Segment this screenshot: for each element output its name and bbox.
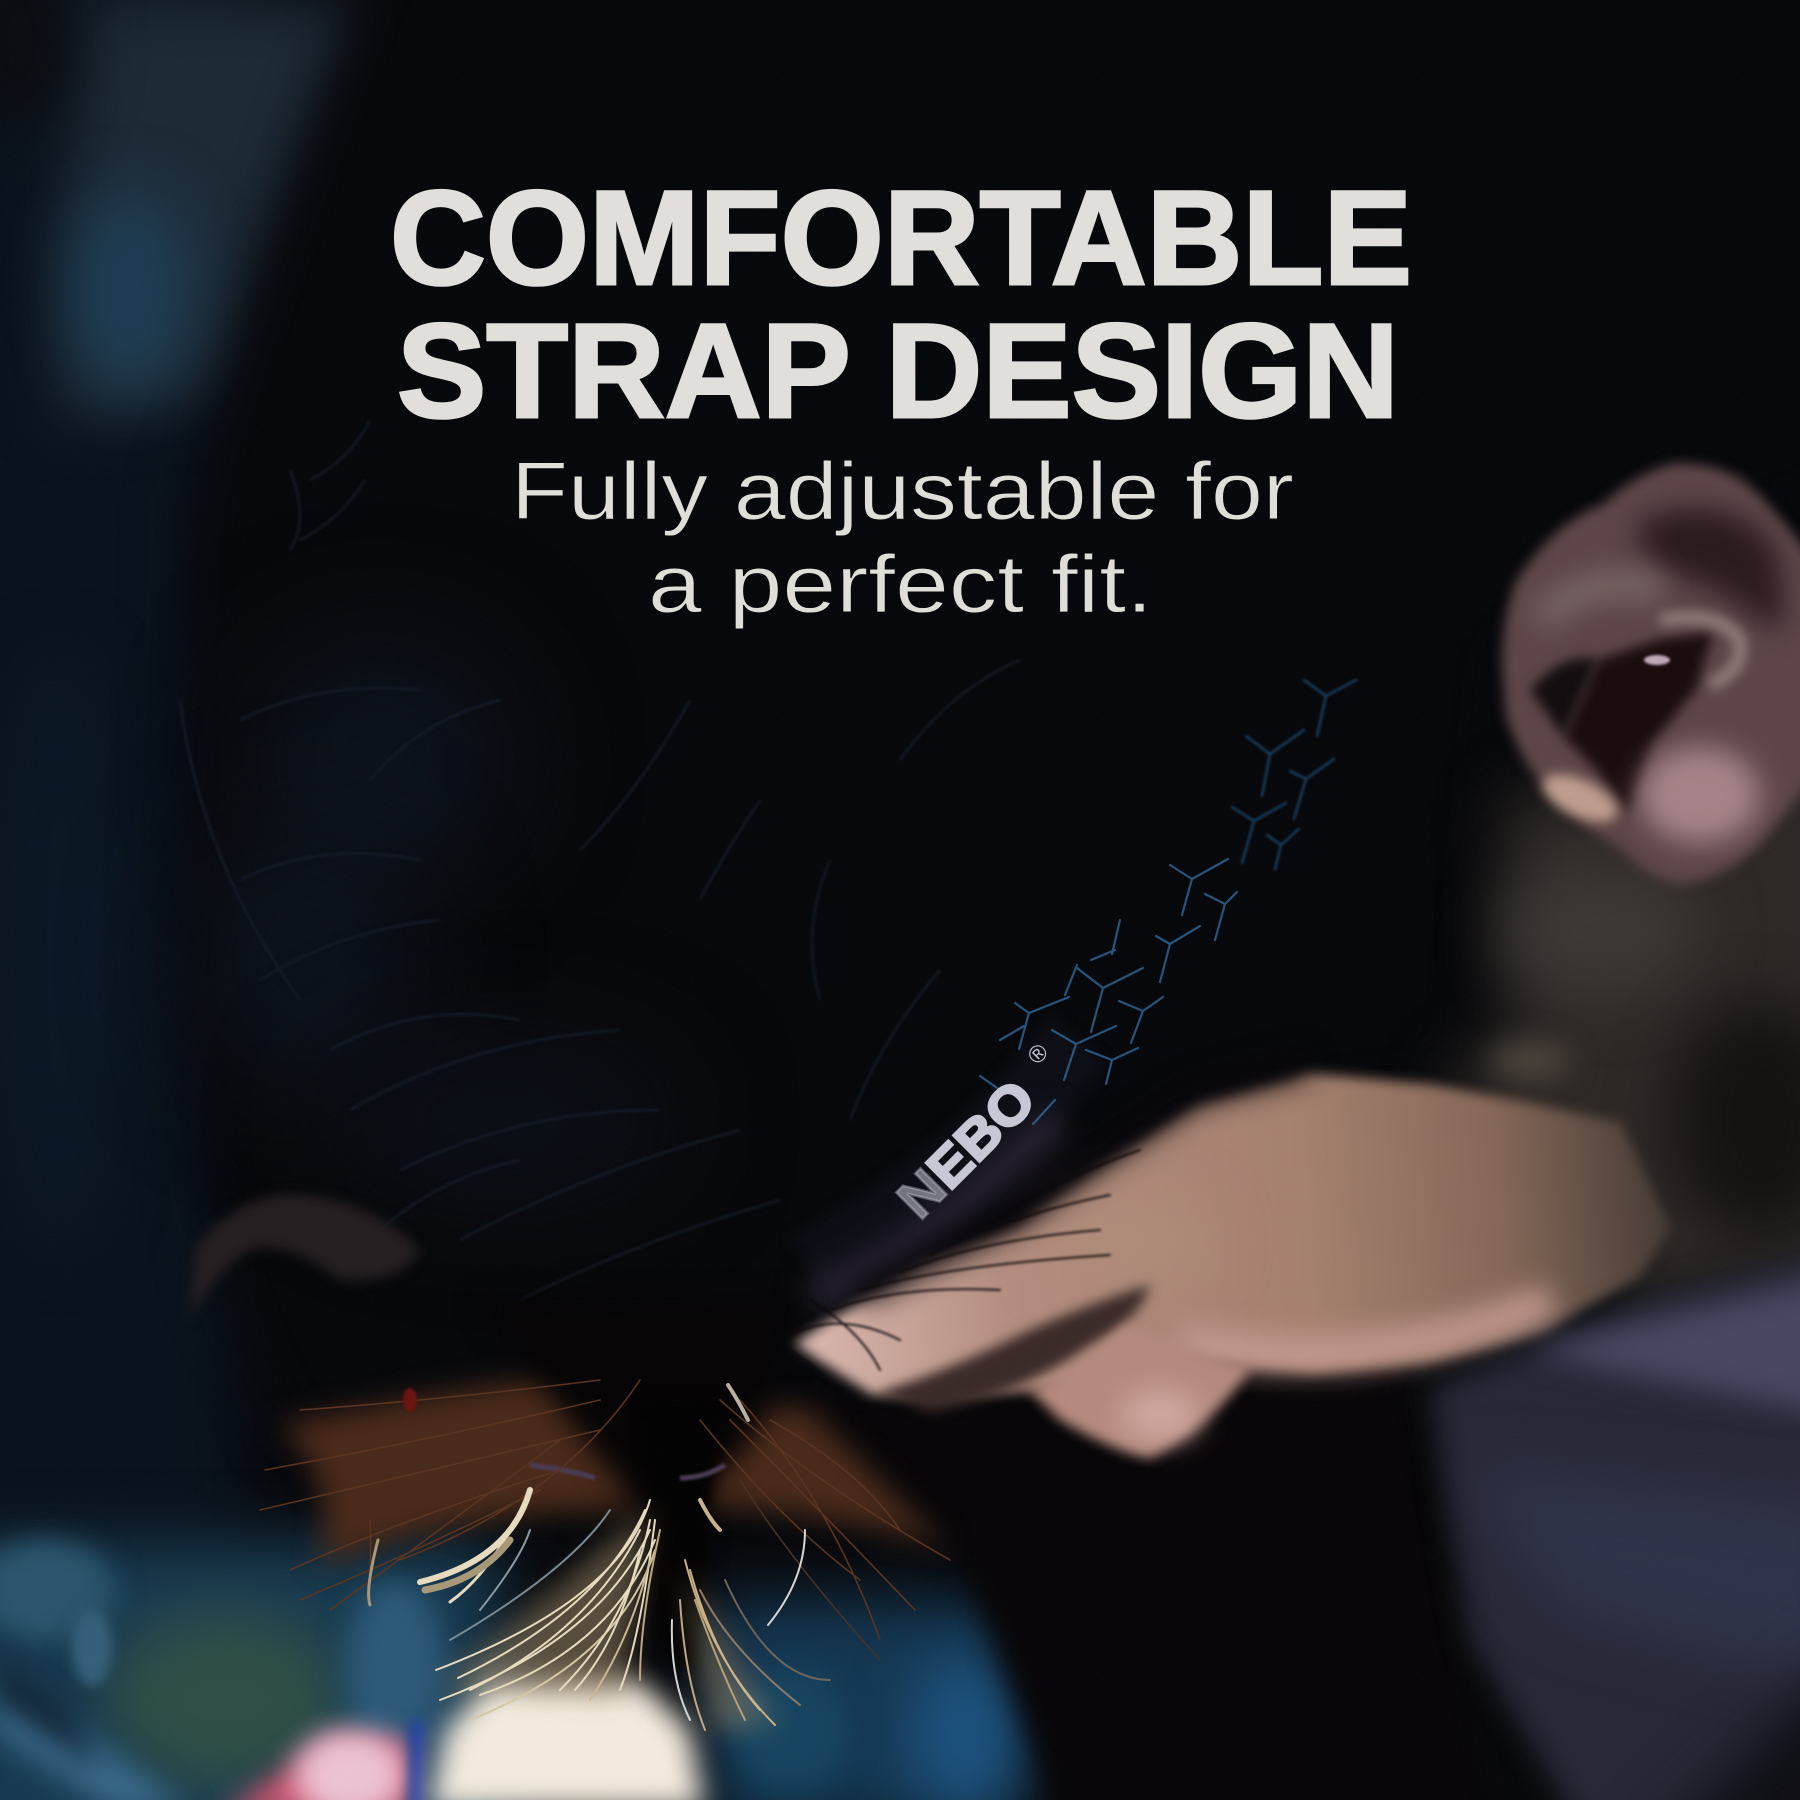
subtitle xyxy=(511,446,1294,630)
hair texture xyxy=(180,420,1020,1300)
strap logo NEBO: ® xyxy=(1022,1038,1054,1070)
shirt xyxy=(1430,1240,1800,1800)
hair band across tail xyxy=(530,1465,725,1478)
hairline fringe over forehead xyxy=(760,1150,1140,1450)
subtitle: Fully adjustable for xyxy=(511,446,1294,537)
strap logo NEBO: NEBO xyxy=(886,1069,1047,1230)
dark soft hairline along forehead xyxy=(860,1064,1308,1295)
title: COMFORTABLE xyxy=(390,164,1412,313)
background: blurred left side of room xyxy=(0,0,370,1540)
strap with hexagon pattern xyxy=(810,680,1356,1300)
eyebrow and eye shadow xyxy=(880,1285,1150,1412)
background: blurred gear at bottom xyxy=(0,1540,1020,1800)
subtitle: a perfect fit. xyxy=(648,539,1153,630)
light strands xyxy=(369,1385,830,1730)
brown strands xyxy=(260,1380,950,1660)
face: forehead and brow xyxy=(792,1064,1670,1458)
ponytail of hair xyxy=(260,1300,950,1730)
red fleck xyxy=(403,1388,417,1412)
strap hexagon lines, upper faded section xyxy=(1232,680,1356,869)
highlighted hair fans xyxy=(440,1510,650,1700)
nose xyxy=(1030,1325,1251,1458)
title: STRAP DESIGN xyxy=(397,297,1399,446)
beard xyxy=(1440,720,1800,1310)
second ear strap loop at back of head xyxy=(190,1195,420,1320)
ear xyxy=(1502,463,1800,884)
strap logo NEBO xyxy=(886,1038,1078,1230)
strap hexagon lines, lower sharp section xyxy=(980,859,1237,1124)
title xyxy=(390,164,1412,446)
